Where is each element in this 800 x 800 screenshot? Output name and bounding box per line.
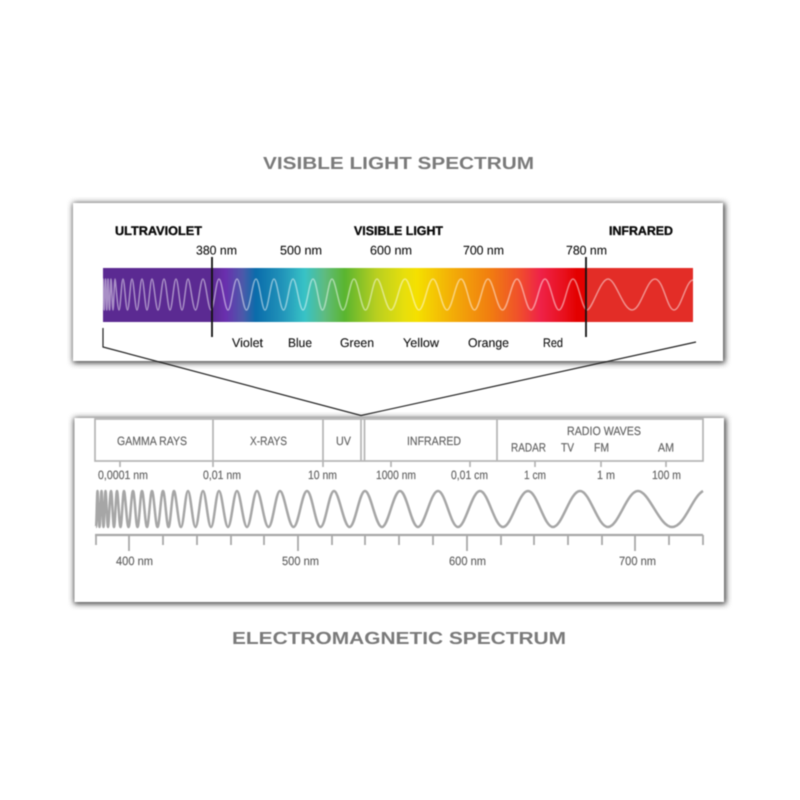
title: visible light spectrum: VISIBLE LIGHT SPECTRUM xyxy=(263,153,534,173)
band labels: RADIO WAVES xyxy=(567,424,641,438)
scale labels: 1000 nm xyxy=(376,468,416,482)
band labels: AM xyxy=(658,440,674,454)
band labels: RADAR xyxy=(511,440,546,454)
wavelength labels: 700 nm xyxy=(463,244,504,258)
axis labels: 600 nm xyxy=(449,554,486,568)
axis labels: 700 nm xyxy=(619,554,656,568)
light wave on spectrum bar xyxy=(103,279,693,310)
title: electromagnetic spectrum: ELECTROMAGNETIC SPECTRUM xyxy=(232,628,566,648)
colour spectrum bar xyxy=(103,268,693,322)
colour name labels: Violet xyxy=(232,336,264,350)
axis labels: 400 nm xyxy=(116,554,153,568)
colour name labels: Yellow xyxy=(403,336,440,350)
band table xyxy=(95,419,703,467)
wavelength labels: 780 nm xyxy=(566,244,607,258)
scale labels: 10 nm xyxy=(308,468,337,482)
colour name labels: Orange xyxy=(468,336,509,350)
colour name labels: Blue xyxy=(288,336,312,350)
wavelength labels: 600 nm xyxy=(370,244,412,258)
heading: infrared: INFRARED xyxy=(609,224,673,238)
colour name labels: Green xyxy=(340,336,374,350)
axis labels xyxy=(116,554,656,568)
heading: ultraviolet: ULTRAVIOLET xyxy=(115,224,202,238)
scale labels: 100 m xyxy=(652,468,681,482)
wavelength labels xyxy=(196,244,607,258)
scale labels: 1 cm xyxy=(524,468,546,482)
scale labels: 0,0001 nm xyxy=(98,468,148,482)
scale labels: 0,01 nm xyxy=(203,468,241,482)
panel: visible light spectrum xyxy=(73,203,725,363)
wavelength labels: 380 nm xyxy=(196,244,237,258)
band labels: TV xyxy=(561,440,574,454)
connector lines between panels xyxy=(103,328,696,416)
electromagnetic wave xyxy=(96,491,703,527)
band labels: GAMMA RAYS xyxy=(117,434,187,448)
colour name labels: Red xyxy=(543,336,563,350)
band labels: FM xyxy=(594,440,609,454)
band labels: X-RAYS xyxy=(250,434,287,448)
wavelength labels: 500 nm xyxy=(280,244,322,258)
band labels xyxy=(117,424,674,454)
colour name labels xyxy=(232,336,563,350)
axis labels: 500 nm xyxy=(282,554,319,568)
marker line: 380 nm xyxy=(211,257,213,337)
scale labels: 1 m xyxy=(597,468,615,482)
wavelength axis xyxy=(95,535,703,551)
band labels: UV xyxy=(336,434,351,448)
scale labels: 0,01 cm xyxy=(451,468,488,482)
panel: electromagnetic spectrum xyxy=(74,418,726,604)
heading: visible light: VISIBLE LIGHT xyxy=(354,224,443,238)
band labels: INFRARED xyxy=(407,434,461,448)
marker line: 780 nm xyxy=(585,257,587,337)
scale labels xyxy=(98,468,681,482)
